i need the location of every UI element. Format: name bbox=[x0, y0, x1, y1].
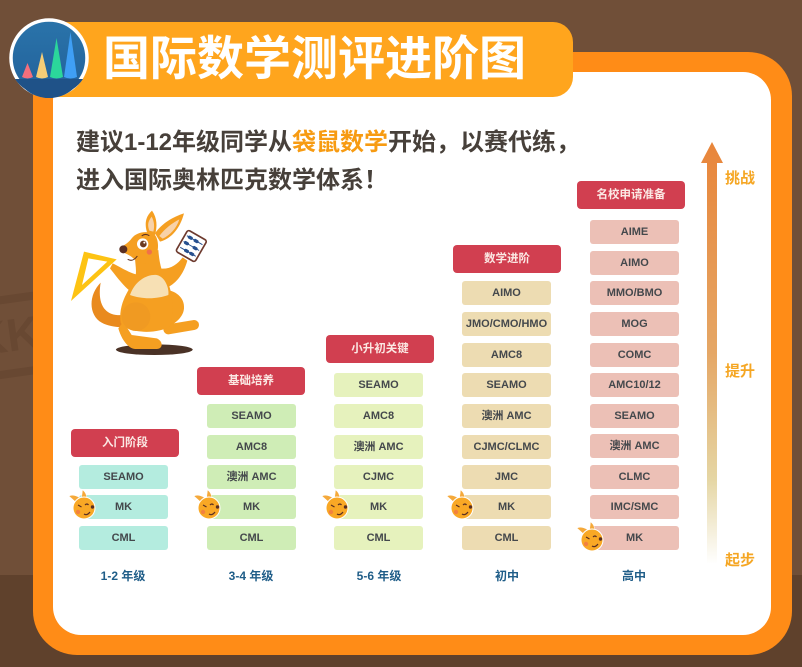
card: CML bbox=[462, 526, 551, 550]
card: CML bbox=[334, 526, 423, 550]
card: 澳洲 AMC: 澳洲 AMC bbox=[353, 441, 404, 453]
header: 基础培养 bbox=[197, 367, 305, 395]
card: MK bbox=[462, 495, 551, 519]
label: 起步: 起步 bbox=[725, 552, 755, 569]
card: MK: MK bbox=[626, 532, 643, 544]
card: CLMC: CLMC bbox=[619, 471, 650, 483]
card: 澳洲 AMC bbox=[207, 465, 296, 489]
kangaroo illustration bbox=[71, 210, 207, 355]
card: SEAMO: SEAMO bbox=[103, 471, 144, 483]
card: CML: CML bbox=[367, 532, 390, 544]
card: SEAMO: SEAMO bbox=[231, 410, 272, 422]
icon: kangaroo head bbox=[577, 522, 604, 550]
card: AMC8 bbox=[207, 435, 296, 459]
icon: kangaroo head bbox=[194, 490, 220, 519]
card: JMC: JMC bbox=[495, 471, 518, 483]
header: 名校申请准备 bbox=[577, 181, 685, 209]
label: 高中: 高中 bbox=[622, 569, 646, 583]
card: 澳洲 AMC bbox=[334, 435, 423, 459]
header: 基础培养: 基础培养 bbox=[228, 375, 274, 387]
card: 澳洲 AMC: 澳洲 AMC bbox=[226, 471, 277, 483]
icon: kangaroo head bbox=[69, 490, 96, 519]
card: COMC: COMC bbox=[618, 349, 651, 361]
header: 数学进阶 bbox=[453, 245, 561, 273]
card: CML: CML bbox=[240, 532, 263, 544]
card: CJMC/CLMC: CJMC/CLMC bbox=[474, 441, 540, 453]
card: SEAMO: SEAMO bbox=[614, 410, 655, 422]
card: AMC8: AMC8 bbox=[491, 349, 522, 361]
card: MMO/BMO: MMO/BMO bbox=[607, 287, 662, 299]
card: AIMO bbox=[590, 251, 679, 275]
card: AIMO bbox=[462, 281, 551, 305]
white panel bbox=[53, 72, 771, 635]
header: 入门阶段: 入门阶段 bbox=[102, 437, 148, 449]
card: 澳洲 AMC bbox=[462, 404, 551, 428]
card: AMC8: AMC8 bbox=[236, 441, 267, 453]
card: AIMO: AIMO bbox=[620, 257, 649, 269]
card: IMC/SMC bbox=[590, 495, 679, 519]
icon: logo badge bbox=[9, 18, 89, 98]
card: AIMO: AIMO bbox=[492, 287, 521, 299]
card: CJMC: CJMC bbox=[363, 471, 394, 483]
header: 小升初关键: 小升初关键 bbox=[351, 343, 409, 355]
title banner bbox=[49, 22, 573, 97]
card: MK: MK bbox=[115, 501, 132, 513]
header: 数学进阶: 数学进阶 bbox=[484, 253, 530, 265]
arrow: progression bbox=[701, 142, 723, 556]
card: CLMC bbox=[590, 465, 679, 489]
card: MOG bbox=[590, 312, 679, 336]
card: SEAMO bbox=[590, 404, 679, 428]
background watermark bbox=[0, 292, 45, 382]
title: 国际数学测评进阶图 bbox=[103, 32, 526, 85]
label: 初中: 初中 bbox=[495, 569, 519, 583]
card: JMO/CMO/HMO bbox=[462, 312, 551, 336]
card: MK bbox=[590, 526, 679, 550]
subtitle text bbox=[76, 129, 580, 194]
card: CML: CML bbox=[112, 532, 135, 544]
card: IMC/SMC: IMC/SMC bbox=[611, 501, 658, 513]
header: 入门阶段 bbox=[71, 429, 179, 457]
card: AMC8 bbox=[334, 404, 423, 428]
subtitle text: 建议1-12年级同学从袋鼠数学开始，以赛代练， bbox=[76, 129, 580, 156]
card: 澳洲 AMC bbox=[590, 434, 679, 458]
card: CML bbox=[207, 526, 296, 550]
label: 挑战: 挑战 bbox=[725, 170, 755, 187]
icon: kangaroo head bbox=[322, 490, 348, 519]
card: 澳洲 AMC: 澳洲 AMC bbox=[609, 440, 660, 452]
card: SEAMO bbox=[462, 373, 551, 397]
card: MK: MK bbox=[498, 501, 515, 513]
card: SEAMO bbox=[334, 373, 423, 397]
card: JMO/CMO/HMO: JMO/CMO/HMO bbox=[466, 318, 547, 330]
card: AMC10/12 bbox=[590, 373, 679, 397]
card: AMC8 bbox=[462, 343, 551, 367]
card: MK bbox=[334, 495, 423, 519]
card: AIME bbox=[590, 220, 679, 244]
card: MK: MK bbox=[243, 501, 260, 513]
card: AMC8: AMC8 bbox=[363, 410, 394, 422]
label: 5-6 年级: 5-6 年级 bbox=[357, 569, 401, 583]
card: MOG: MOG bbox=[621, 318, 648, 330]
card: SEAMO bbox=[207, 404, 296, 428]
card: SEAMO: SEAMO bbox=[358, 379, 399, 391]
card: COMC bbox=[590, 343, 679, 367]
subtitle text: 进入国际奥林匹克数学体系！ bbox=[76, 167, 388, 194]
card: MK bbox=[207, 495, 296, 519]
icon: kangaroo head bbox=[447, 490, 474, 519]
card: 澳洲 AMC: 澳洲 AMC bbox=[481, 410, 532, 422]
card: CML bbox=[79, 526, 168, 550]
card: CML: CML bbox=[495, 532, 518, 544]
label: 提升: 提升 bbox=[725, 363, 755, 380]
card: AMC10/12: AMC10/12 bbox=[608, 379, 661, 391]
card: CJMC/CLMC bbox=[462, 435, 551, 459]
card: MMO/BMO bbox=[590, 281, 679, 305]
background lower band bbox=[0, 575, 802, 667]
card: CJMC bbox=[334, 465, 423, 489]
header: 名校申请准备: 名校申请准备 bbox=[596, 189, 666, 201]
card: JMC bbox=[462, 465, 551, 489]
label: 3-4 年级: 3-4 年级 bbox=[229, 569, 273, 583]
card: AIME: AIME bbox=[621, 226, 648, 238]
card: SEAMO bbox=[79, 465, 168, 489]
header: 小升初关键 bbox=[326, 335, 434, 363]
card: MK bbox=[79, 495, 168, 519]
label: 1-2 年级: 1-2 年级 bbox=[101, 569, 145, 583]
card: SEAMO: SEAMO bbox=[486, 379, 527, 391]
card: MK: MK bbox=[370, 501, 387, 513]
